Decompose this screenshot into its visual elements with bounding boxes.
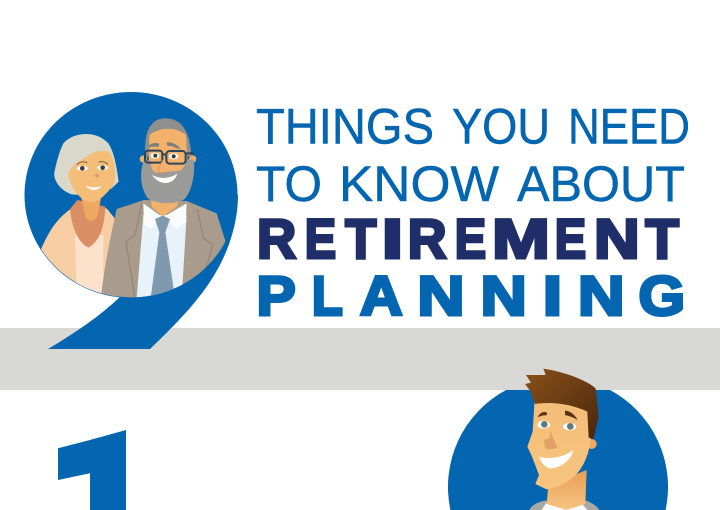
title line 3: retirement: R (408, 207, 447, 270)
neck (151, 200, 178, 216)
lapels (126, 202, 213, 298)
woman (40, 134, 120, 305)
shirt collar (143, 203, 187, 229)
grey band (0, 328, 720, 390)
title line 3: retirement: N (594, 207, 640, 270)
title line 1 (256, 97, 690, 154)
title line 4: planning: A (360, 266, 403, 328)
numeral 9 bowl (24, 92, 238, 298)
title line 1: THINGS (256, 97, 434, 154)
numeral 9 with retired couple (24, 92, 238, 349)
title line 4: planning: N (480, 264, 527, 327)
title line 4: planning: L (312, 266, 343, 328)
hair (54, 134, 119, 195)
face (148, 128, 188, 172)
ears (140, 155, 196, 163)
nose (544, 431, 557, 449)
nose (159, 160, 165, 173)
title line 4: planning (256, 264, 685, 328)
title line 2: KNOW (339, 155, 499, 212)
title line 4: planning: G (638, 266, 685, 328)
hair (525, 369, 599, 439)
title line 3: retirement: T (345, 209, 377, 270)
glasses (145, 151, 194, 164)
ear (587, 439, 597, 449)
smile (152, 174, 177, 183)
shirt (137, 215, 187, 298)
smile (86, 186, 101, 190)
title line 4: planning: N (417, 265, 465, 327)
numeral 1 (58, 430, 126, 510)
title line 3: retirement: M (492, 208, 550, 270)
hair (145, 118, 191, 157)
nose (95, 174, 99, 178)
title line 3: retirement: E (455, 207, 486, 270)
scarf (70, 200, 105, 248)
tie (151, 216, 174, 296)
neck (81, 198, 102, 221)
title line 3: retirement: E (555, 207, 586, 270)
man (100, 118, 227, 305)
circle behind young man (448, 390, 668, 510)
eyes and brows (537, 411, 578, 430)
title line 4: planning: P (256, 265, 296, 328)
numeral 9 tail (48, 195, 238, 349)
title line 2: ABOUT (517, 155, 685, 212)
title line 3: retirement: T (645, 207, 679, 270)
retired couple illustration (40, 118, 227, 305)
title line 3: retirement (257, 207, 679, 270)
face (527, 393, 591, 489)
young man (525, 369, 599, 510)
beard (141, 159, 194, 203)
face (68, 151, 115, 202)
title line 1: NEED (568, 97, 690, 154)
smile (539, 450, 573, 468)
title line 2 (256, 155, 685, 212)
neck (547, 470, 587, 510)
title line 2: TO (256, 155, 322, 212)
title line 4: planning: I (543, 265, 562, 328)
shirt (529, 500, 599, 510)
numeral 1 body (58, 431, 126, 510)
title line 1: YOU (452, 97, 550, 154)
eyes (149, 142, 181, 159)
numeral 1 character: 1 (28, 411, 176, 510)
jacket (100, 200, 227, 305)
eyes and brows (77, 162, 108, 171)
blouse (75, 235, 103, 298)
title line 4: planning: N (578, 264, 625, 327)
title line 3: retirement: E (305, 207, 336, 270)
cardigan (41, 208, 117, 296)
title line 3: retirement: I (382, 208, 403, 270)
title (256, 97, 690, 328)
title line 3: retirement: R (257, 207, 296, 270)
